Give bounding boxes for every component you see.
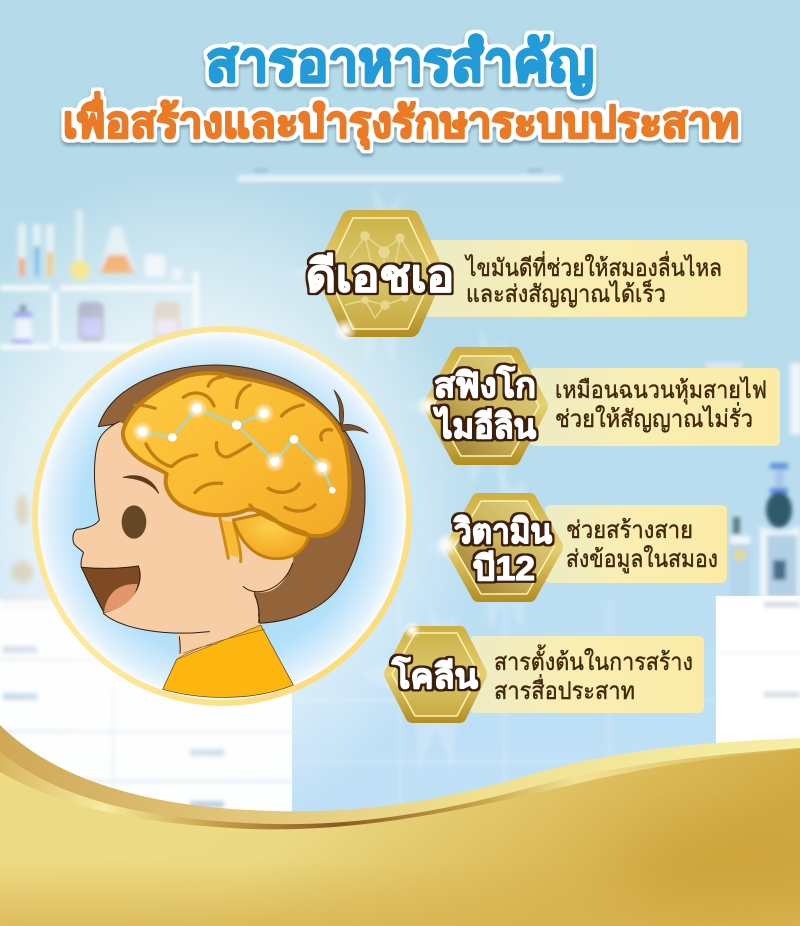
- label: ดีเอชเอ: [306, 252, 454, 301]
- light burst: [425, 470, 585, 630]
- hexagon badge: [316, 210, 444, 342]
- description text: [494, 644, 693, 705]
- lab shelves and glassware: [0, 210, 200, 350]
- title line 1: สารอาหารสำคัญ: [206, 30, 594, 95]
- label: [433, 365, 536, 446]
- face: [73, 422, 293, 632]
- description bar: [545, 505, 727, 583]
- faint shapes behind haze: [11, 494, 33, 583]
- glow ring: [35, 329, 409, 703]
- white haze: [0, 170, 480, 830]
- lab benches: [0, 592, 800, 838]
- character head: [73, 365, 368, 697]
- description text: สารสื่อประสาท: [494, 674, 635, 705]
- neck: [177, 587, 260, 659]
- hexagon badge: [417, 347, 548, 465]
- label: [453, 513, 552, 588]
- title: [63, 30, 739, 150]
- item: vitamin B12: [425, 470, 727, 630]
- description text: ส่งข้อมูลในสมอง: [566, 545, 718, 574]
- description bar: [470, 636, 704, 713]
- wave top highlight: [0, 725, 800, 926]
- tongue: [104, 584, 137, 613]
- mouth: [81, 566, 140, 613]
- hair tuft: [334, 390, 368, 433]
- description text: สารตั้งต้นในการสร้าง: [494, 644, 693, 676]
- label: สฟิงโก: [434, 365, 536, 405]
- brain stem: [220, 518, 241, 562]
- brain folds: [135, 377, 332, 533]
- cerebrum: [123, 373, 350, 536]
- description text: ไขมันดีที่ช่วยให้สมองลื่นไหล: [464, 251, 722, 282]
- description text: ช่วยให้สัญญาณไม่รั่ว: [555, 402, 753, 433]
- hexagon badge: [435, 493, 563, 602]
- neural connections: [142, 408, 332, 490]
- description text: และส่งสัญญาณได้เร็ว: [466, 279, 666, 308]
- hair: [98, 365, 365, 623]
- network pattern: [345, 232, 420, 318]
- shirt: [163, 625, 293, 697]
- description bar: [425, 240, 747, 317]
- neuron sparks: [132, 398, 336, 494]
- description text: [555, 376, 767, 433]
- title shelf highlight: [238, 168, 562, 182]
- light burst: [360, 605, 510, 770]
- description text: [464, 251, 722, 308]
- eye: [122, 505, 146, 539]
- wave body: [0, 750, 800, 926]
- item: DHA: [290, 185, 747, 365]
- light burst: [290, 185, 470, 365]
- cerebellum: [233, 510, 309, 559]
- item: sphingomyelin: [405, 325, 780, 490]
- label: วิตามิน: [453, 513, 552, 551]
- wave metallic band: [0, 748, 800, 926]
- label: บี12: [473, 550, 535, 588]
- hexagon badge: [384, 621, 487, 723]
- description bar: [530, 368, 780, 446]
- item: choline: [360, 605, 704, 770]
- description text: เหมือนฉนวนหุ้มสายไฟ: [555, 376, 767, 405]
- description text: [566, 517, 718, 574]
- light burst: [405, 325, 570, 490]
- brain illustration circle: [35, 329, 409, 703]
- eyebrow: [123, 476, 159, 493]
- label: ไมอีลิน: [433, 406, 536, 446]
- title line 2: เพื่อสร้างและบำรุงรักษาระบบประสาท: [63, 92, 739, 150]
- golden wave footer: [0, 725, 800, 926]
- lab bottles right: [705, 362, 800, 600]
- label: โคลีน: [391, 656, 478, 696]
- description text: ช่วยสร้างสาย: [566, 517, 693, 544]
